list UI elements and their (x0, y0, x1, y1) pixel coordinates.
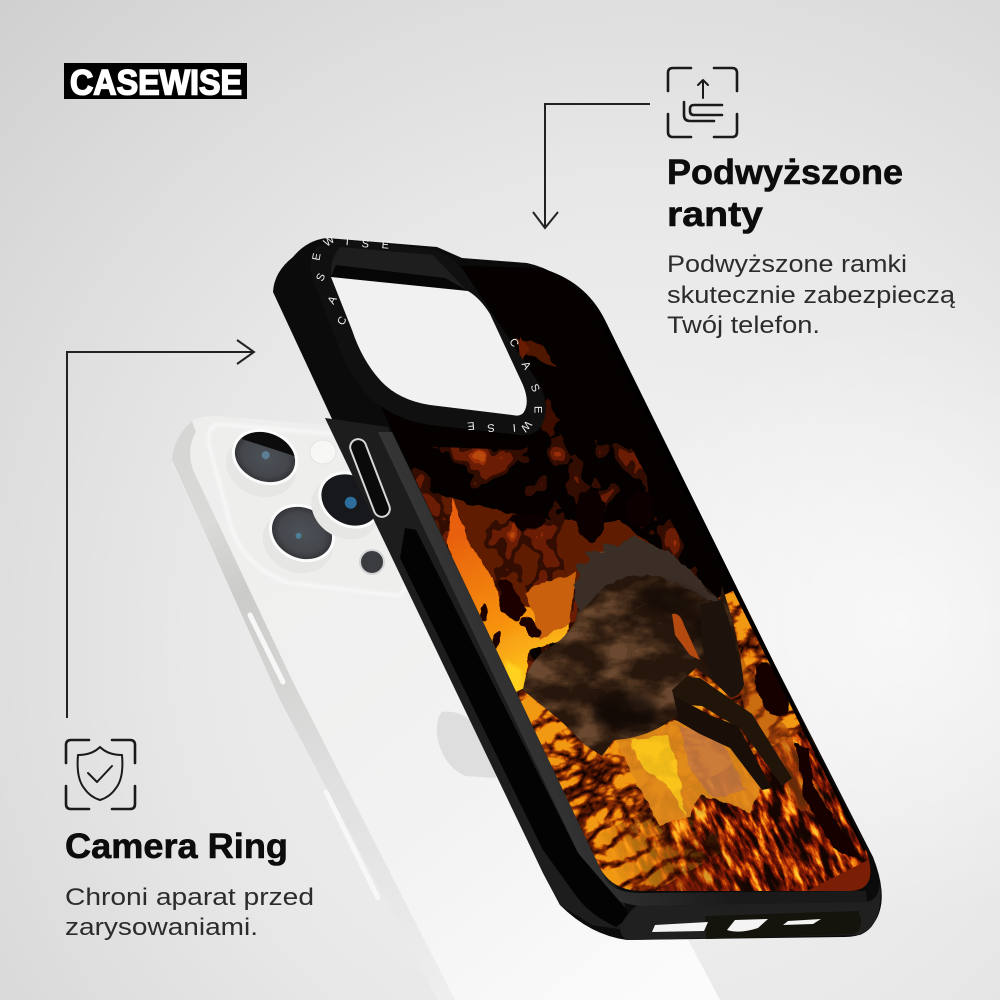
orange flame left (447, 497, 570, 700)
corner red base (656, 830, 870, 891)
lower fire texture (600, 728, 869, 891)
brand logo (64, 63, 247, 102)
ring outer (310, 240, 546, 435)
ring text right: S (487, 421, 495, 434)
logo text: CASEWISE (70, 64, 242, 102)
black case (273, 238, 882, 940)
yellow flame base (505, 660, 522, 692)
neck shadow (632, 586, 740, 690)
logo box (64, 63, 247, 99)
port 1 (652, 922, 708, 932)
artwork: horse in flames (381, 266, 870, 891)
ring text right: I (512, 421, 516, 433)
ring hole wall (331, 247, 468, 292)
side rim highlight (378, 432, 867, 906)
body shadow (591, 692, 659, 732)
text: camera ring description: zarysowaniami. (65, 914, 258, 941)
ring text left: C (335, 315, 350, 328)
sensor (360, 550, 384, 574)
ring text left: S (314, 272, 328, 283)
text: raised edges description: Podwyższone ramki (667, 251, 907, 278)
text: camera ring description: Chroni aparat przed (65, 884, 314, 911)
volume button (348, 437, 392, 519)
ring text right: E (531, 406, 543, 413)
ring text right: W (517, 418, 534, 434)
black base (381, 266, 778, 870)
apple logo (437, 712, 497, 778)
horse (523, 534, 792, 790)
ring text left: E (381, 239, 389, 252)
ring text left: S (361, 238, 369, 251)
ring text left: A (326, 294, 340, 306)
ring wall dark (331, 265, 470, 292)
phone back (172, 416, 720, 1000)
ring text left: W (322, 233, 338, 249)
side buttons (250, 615, 378, 898)
gap flame (672, 614, 700, 660)
dark gaps (512, 489, 654, 541)
heading: Podwyższone ranty (667, 153, 903, 234)
screen edge darkening (708, 528, 866, 851)
port 3 (783, 919, 821, 925)
heading: Podwyższone ranty: ranty (667, 195, 764, 234)
top embers (512, 335, 560, 440)
head (700, 600, 744, 697)
arrow: to camera ring (67, 340, 254, 718)
dark flame spots (481, 576, 543, 648)
dark tree (795, 742, 860, 860)
flash (310, 440, 336, 464)
body (523, 538, 744, 756)
pale orange patch (680, 725, 745, 800)
camera plateau (208, 424, 420, 596)
mane (574, 534, 722, 612)
text: camera ring description (65, 884, 314, 941)
ring text left: I (345, 236, 349, 248)
text: raised edges description: Twój telefon. (667, 312, 820, 339)
translucent band over phone (325, 418, 625, 930)
text: raised edges description: skutecznie zabezpieczą (667, 282, 956, 309)
amber patches (525, 572, 575, 640)
ring text left: E (310, 252, 324, 262)
phone side band (172, 421, 455, 1000)
ring text right: E (467, 419, 475, 432)
lower left swirl (516, 588, 842, 891)
port 2 (727, 919, 768, 932)
white phone (172, 416, 720, 1000)
front leg far (676, 704, 772, 790)
icon: shield (66, 740, 135, 809)
lens top (217, 418, 308, 508)
icon: raised edges (668, 68, 737, 137)
right side glow (735, 645, 840, 830)
front leg near (672, 675, 792, 786)
painted embers (411, 435, 698, 680)
mid glow layer (421, 492, 660, 608)
dark hole (754, 662, 790, 717)
case body (273, 238, 882, 940)
heading: Camera Ring: Camera Ring (65, 827, 288, 866)
camera ring (310, 233, 546, 435)
heading: Podwyższone ranty: Podwyższone (667, 153, 903, 192)
ring text right: C (506, 336, 521, 349)
ring text right: S (528, 382, 542, 394)
bottom ports strip (620, 880, 881, 940)
text: raised edges description (667, 251, 956, 339)
arrow: to raised edges (533, 104, 650, 228)
lens right (300, 459, 394, 551)
ring text right: A (519, 360, 533, 372)
lens bottom (252, 492, 346, 584)
side slot (400, 528, 628, 927)
olive strip (705, 911, 861, 939)
ring hole (331, 277, 527, 416)
yellow tongue (630, 735, 685, 815)
centre flame (615, 720, 762, 825)
amber mass (615, 720, 762, 825)
